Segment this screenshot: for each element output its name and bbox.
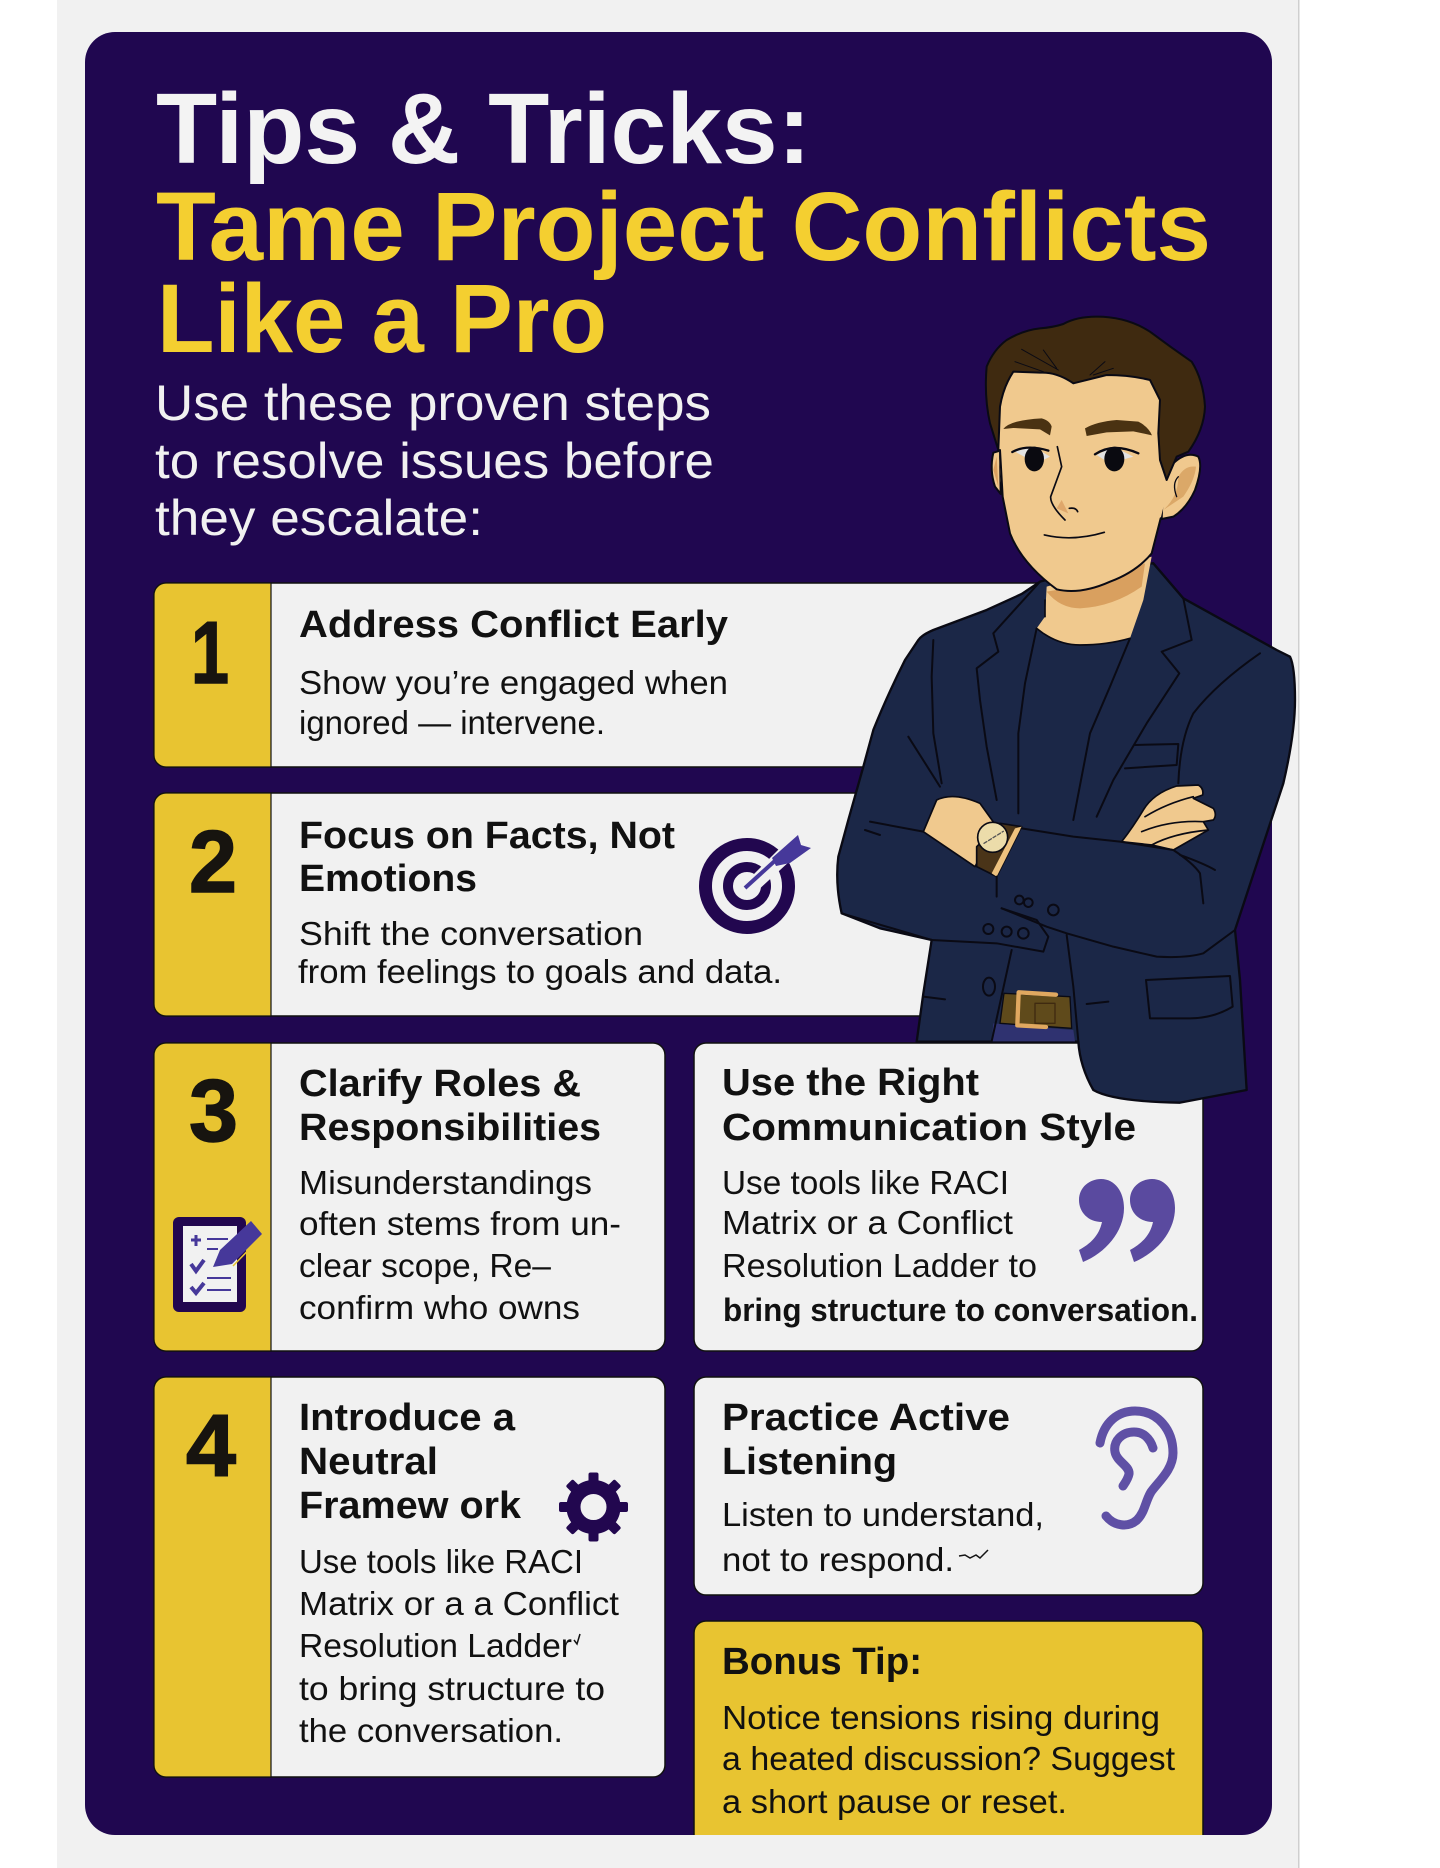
panel: step 4: Matrix or a a Conflict: [299, 1585, 619, 1622]
panel: active listening: [694, 1377, 1203, 1595]
panel: step 3: Clarify Roles &: [299, 1063, 581, 1105]
panel: step 4: Framew ork: [299, 1485, 522, 1527]
forearm sleeves: [842, 822, 1235, 957]
panel: step 2: Focus on Facts, Not: [299, 815, 675, 857]
panel: communication style: Communication Style: [722, 1107, 1136, 1149]
panel: bonus tip: [694, 1621, 1203, 1835]
panel: step 3: Misunderstandings: [299, 1164, 592, 1201]
panel: step 4: Resolution Ladder: [299, 1627, 572, 1664]
neck: [1037, 557, 1152, 645]
eyes: [1015, 447, 1050, 463]
face: [997, 367, 1170, 591]
panel: step 3: Responsibilities: [299, 1107, 601, 1149]
panel: step 1: [154, 583, 1100, 767]
pants: [992, 1023, 1075, 1041]
left hand and watch: [923, 797, 1022, 877]
panel: step 4: the conversation.: [299, 1712, 563, 1749]
right hand: [1122, 785, 1215, 850]
panel: step 3: confirm who owns: [299, 1289, 580, 1326]
subtitle: they escalate:: [155, 490, 483, 546]
panel: step 1: Show you’re engaged when: [299, 664, 728, 701]
hair: [986, 317, 1205, 480]
jacket: [837, 563, 1295, 1103]
title: Like a Pro: [157, 264, 607, 373]
panel: step 4: to bring structure to: [299, 1670, 605, 1707]
panel: step 3: 3: [189, 1061, 238, 1160]
panel: step 3: often stems from un-: [299, 1205, 621, 1242]
panel: step 1: Address Conflict Early: [299, 604, 728, 646]
icon: ear: [1100, 1411, 1173, 1525]
jacket lines: [908, 563, 1260, 1041]
panel: step 1: ignored — intervene.: [299, 704, 605, 741]
icon: clipboard checklist with pen: [173, 1217, 262, 1312]
panel: step 4: Use tools like RACI: [299, 1543, 583, 1580]
nose and mouth: [1057, 500, 1068, 513]
panel: communication style: bring structure to conversation.: [723, 1292, 1198, 1328]
panel: communication style: Resolution Ladder to: [722, 1247, 1037, 1284]
eyebrows: [1003, 418, 1052, 435]
panel: active listening: Practice Active: [722, 1397, 1010, 1439]
panel: bonus tip: a heated discussion? Suggest: [722, 1740, 1175, 1777]
panel: communication style: Use the Right: [722, 1062, 979, 1104]
panel: active listening: Listening: [722, 1441, 897, 1483]
panel: step 4: [154, 1377, 665, 1777]
panel: bonus tip: a short pause or reset.: [722, 1783, 1067, 1820]
panel: communication style: Use tools like RACI: [722, 1164, 1009, 1201]
panel: step 2: from feelings to goals and data.: [298, 953, 782, 990]
panel: step 4: Neutral: [299, 1441, 438, 1483]
panel: communication style: [694, 1043, 1203, 1351]
subtitle: to resolve issues before: [155, 433, 714, 489]
panel: active listening: not to respond.: [722, 1541, 954, 1578]
icon: gear: [559, 1472, 628, 1542]
panel: step 2: Shift the conversation: [299, 915, 643, 952]
panel: step 2: [154, 793, 1000, 1016]
ears: [992, 451, 1001, 494]
panel: communication style: Matrix or a Conflict: [722, 1204, 1013, 1241]
panel: step 2: Emotions: [299, 858, 477, 900]
panel: step 4: Introduce a: [299, 1397, 516, 1439]
panel: main purple background: [85, 32, 1272, 1835]
belt and buckle: [1000, 992, 1072, 1028]
panel: bonus tip: Bonus Tip:: [722, 1641, 922, 1683]
panel: step 1: 1: [191, 603, 229, 702]
panel: step 4: 4: [186, 1396, 236, 1495]
subtitle: [155, 375, 714, 546]
panel: step 3: [154, 1043, 665, 1351]
panel: bonus tip: Notice tensions rising during: [722, 1699, 1160, 1736]
subtitle: Use these proven steps: [155, 375, 711, 431]
title: Tame Project Conflicts: [156, 172, 1211, 281]
illustration: man with crossed arms: [837, 317, 1295, 1103]
title: Tips & Tricks:: [156, 73, 811, 185]
icon: target with arrow: [706, 835, 811, 928]
panel: step 2: 2: [189, 812, 237, 911]
title: [156, 73, 1211, 373]
panel: step 3: clear scope, Re–: [299, 1247, 552, 1284]
panel: active listening: Listen to understand,: [722, 1496, 1044, 1533]
icon: quotation marks: [1079, 1179, 1175, 1262]
